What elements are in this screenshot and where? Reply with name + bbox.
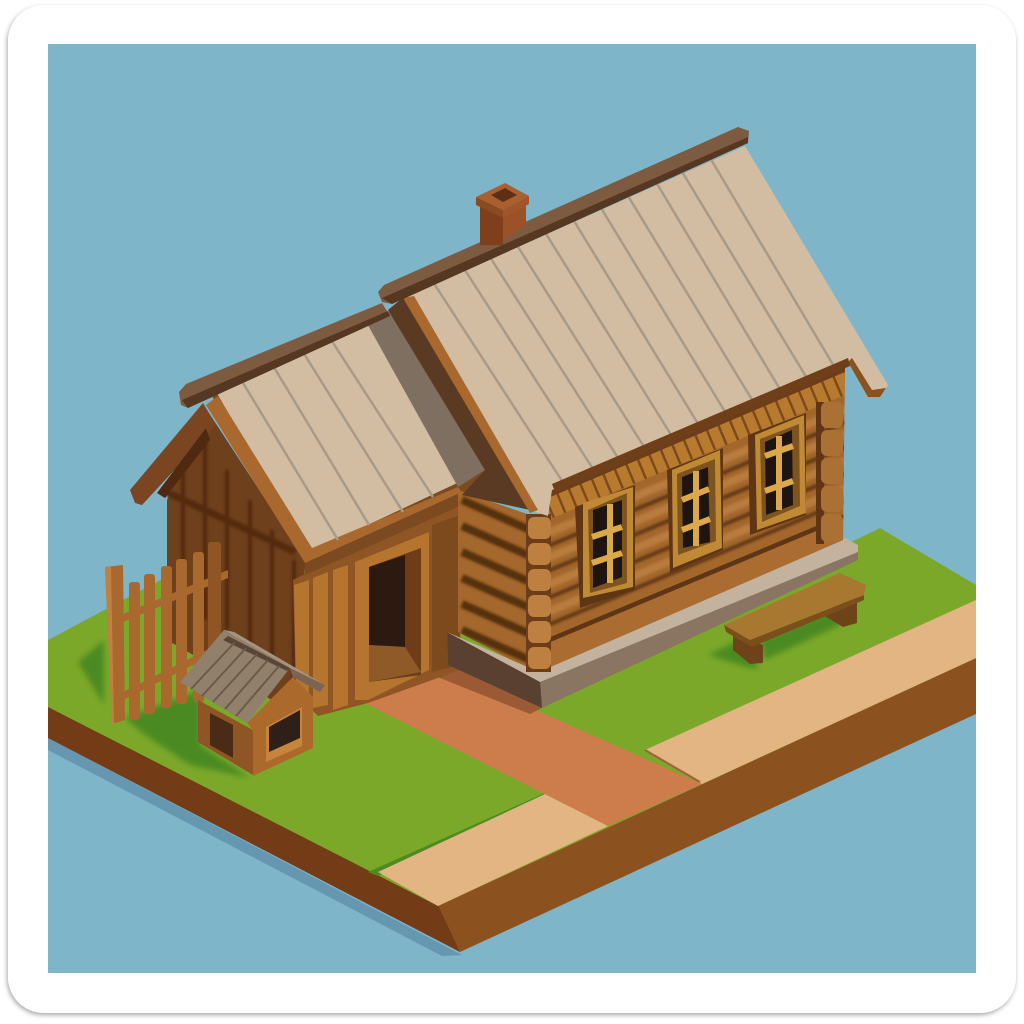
dirt road	[378, 600, 976, 906]
eave trim	[552, 358, 850, 492]
ground shadows	[78, 605, 840, 778]
window 2	[667, 448, 723, 573]
bench	[724, 573, 866, 664]
annex front wall	[293, 490, 462, 716]
terracotta walkway	[365, 662, 702, 826]
windows	[575, 413, 806, 608]
window 3	[748, 413, 806, 535]
chimney	[476, 183, 529, 245]
picket fence	[105, 542, 228, 724]
main roof	[378, 127, 888, 516]
island base	[48, 658, 976, 956]
annex doorway	[355, 532, 429, 700]
left corner logs	[526, 514, 551, 672]
plinth	[447, 538, 858, 708]
ridge beam	[378, 127, 749, 304]
left rake trim	[403, 296, 538, 513]
annex backing	[212, 318, 490, 570]
roof valley shadow	[388, 296, 530, 510]
annex roof	[179, 303, 485, 563]
window 1	[575, 485, 635, 608]
right corner logs	[816, 402, 843, 544]
log facade	[548, 363, 845, 668]
grass	[48, 528, 976, 906]
doghouse roof	[180, 630, 325, 723]
doghouse	[180, 630, 325, 776]
annex gable wall	[130, 403, 305, 716]
main side wall logs	[458, 491, 527, 666]
